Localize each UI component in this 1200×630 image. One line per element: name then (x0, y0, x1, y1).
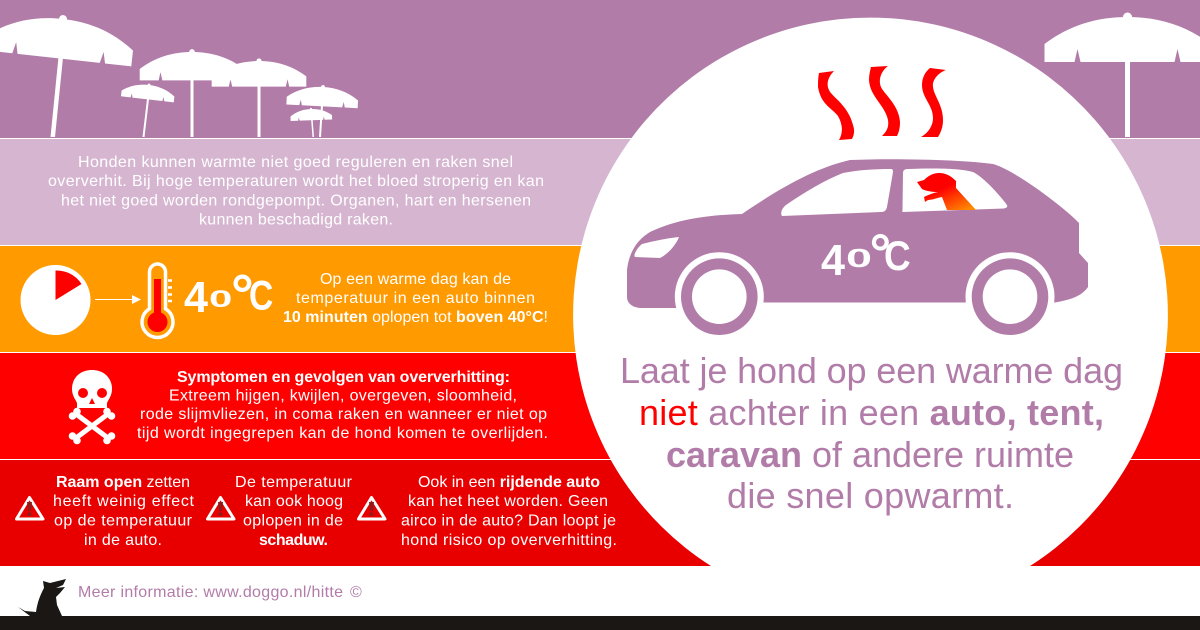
temperature label: 0 (209, 286, 232, 313)
temperature label (184, 263, 273, 327)
warning text: schaduw (235, 474, 353, 549)
temperature text: temperatuur in een auto binnen (296, 290, 535, 307)
intro text (48, 154, 544, 228)
headline message: caravan of andere ruimte (666, 434, 1074, 475)
temperature label: C (249, 273, 273, 319)
temperature text (283, 271, 548, 326)
temperature label: ° (231, 263, 254, 327)
warning text: rijdende auto: Ook in een rijdende auto (418, 474, 600, 491)
icon: headlight (634, 237, 679, 258)
icon: skull and crossbones (69, 370, 115, 444)
warning text: raam open: op de temperatuur (54, 512, 193, 530)
icon: warning triangle 1 (16, 498, 43, 519)
car temperature label (821, 224, 911, 285)
panel: footer ground (0, 616, 1200, 630)
panel: symptoms band (0, 353, 1200, 459)
symptoms text (137, 369, 548, 442)
panel: white circle clipped to bands (573, 18, 1168, 566)
temperature label: 4 (184, 274, 208, 322)
icon: warning triangle 2 (208, 498, 234, 519)
icon: front window (781, 169, 893, 216)
warning text: schaduw: oplopen in de (243, 512, 343, 530)
car temperature label: ° (870, 224, 891, 284)
warning text: schaduw: kan ook hoog (245, 493, 343, 510)
warning text: rijdende auto: hond risico op oververhitting. (401, 532, 617, 549)
arrow: clock to thermometer (95, 295, 141, 304)
intro text: oververhit. Bij hoge temperaturen wordt het bloed stroperig en kan (48, 173, 544, 190)
warning text: rijdende auto: kan het heet worden. Geen (408, 493, 608, 510)
headline message: niet achter in een auto, tent, (639, 392, 1104, 433)
panel: sky background (0, 0, 1200, 138)
panel: warnings band (0, 460, 1200, 566)
symptoms text: rode slijmvliezen, in coma raken en wanneer er niet op (140, 406, 547, 423)
intro text: het niet goed worden rondgepompt. Organen, hart en hersenen (61, 192, 531, 210)
icon: front wheel (675, 252, 764, 341)
icon: clock with ten minutes wedge (20, 265, 90, 335)
icon: warning triangle 3 (358, 498, 385, 519)
car temperature label: 0 (846, 244, 872, 273)
warning text: schaduw: De temperatuur (235, 474, 353, 491)
warning text: raam open: in de auto. (84, 532, 162, 549)
warning text: schaduw: schaduw. (259, 532, 328, 549)
icon: heat waves (818, 66, 946, 140)
headline message: die snel opwarmt. (727, 475, 1014, 516)
car temperature label: 4 (821, 237, 845, 285)
warning text: raam open: Raam open zetten (56, 474, 190, 491)
intro text: kunnen beschadigd raken. (199, 212, 393, 228)
headline message (620, 350, 1123, 516)
symptoms text: Symptomen en gevolgen van oververhitting: (177, 369, 510, 386)
footer link: © (350, 584, 362, 601)
headline message: Laat je hond op een warme dag (620, 350, 1123, 391)
temperature text: Op een warme dag kan de (320, 271, 511, 288)
icon: beach umbrella right (1044, 12, 1200, 137)
warning text: raam open (53, 474, 195, 549)
symptoms text: Extreem hijgen, kwijlen, overgeven, sloomheid, (169, 388, 517, 404)
panel: intro band (0, 139, 1200, 245)
icon: rear window with dog (902, 168, 1007, 212)
icon: beach umbrellas left (0, 7, 359, 137)
warning text: raam open: heeft weinig effect (53, 493, 195, 510)
footer link: Meer informatie: www.doggo.nl/hitte (78, 584, 343, 601)
warning text: rijdende auto: airco in de auto? Dan loopt je (401, 512, 616, 530)
warning text: rijdende auto (401, 474, 617, 549)
icon: thermometer (142, 264, 173, 337)
icon: rear wheel (966, 252, 1054, 341)
icon: dog silhouette (18, 579, 66, 616)
panel: temperature band (0, 246, 1200, 352)
car illustration (627, 159, 1088, 341)
car temperature label: C (884, 233, 911, 280)
temperature text: 10 minuten oplopen tot boven 40°C! (283, 309, 548, 326)
symptoms text: tijd wordt ingegrepen kan de hond komen te overlijden. (137, 425, 548, 442)
intro text: Honden kunnen warmte niet goed reguleren en raken snel (78, 154, 513, 171)
